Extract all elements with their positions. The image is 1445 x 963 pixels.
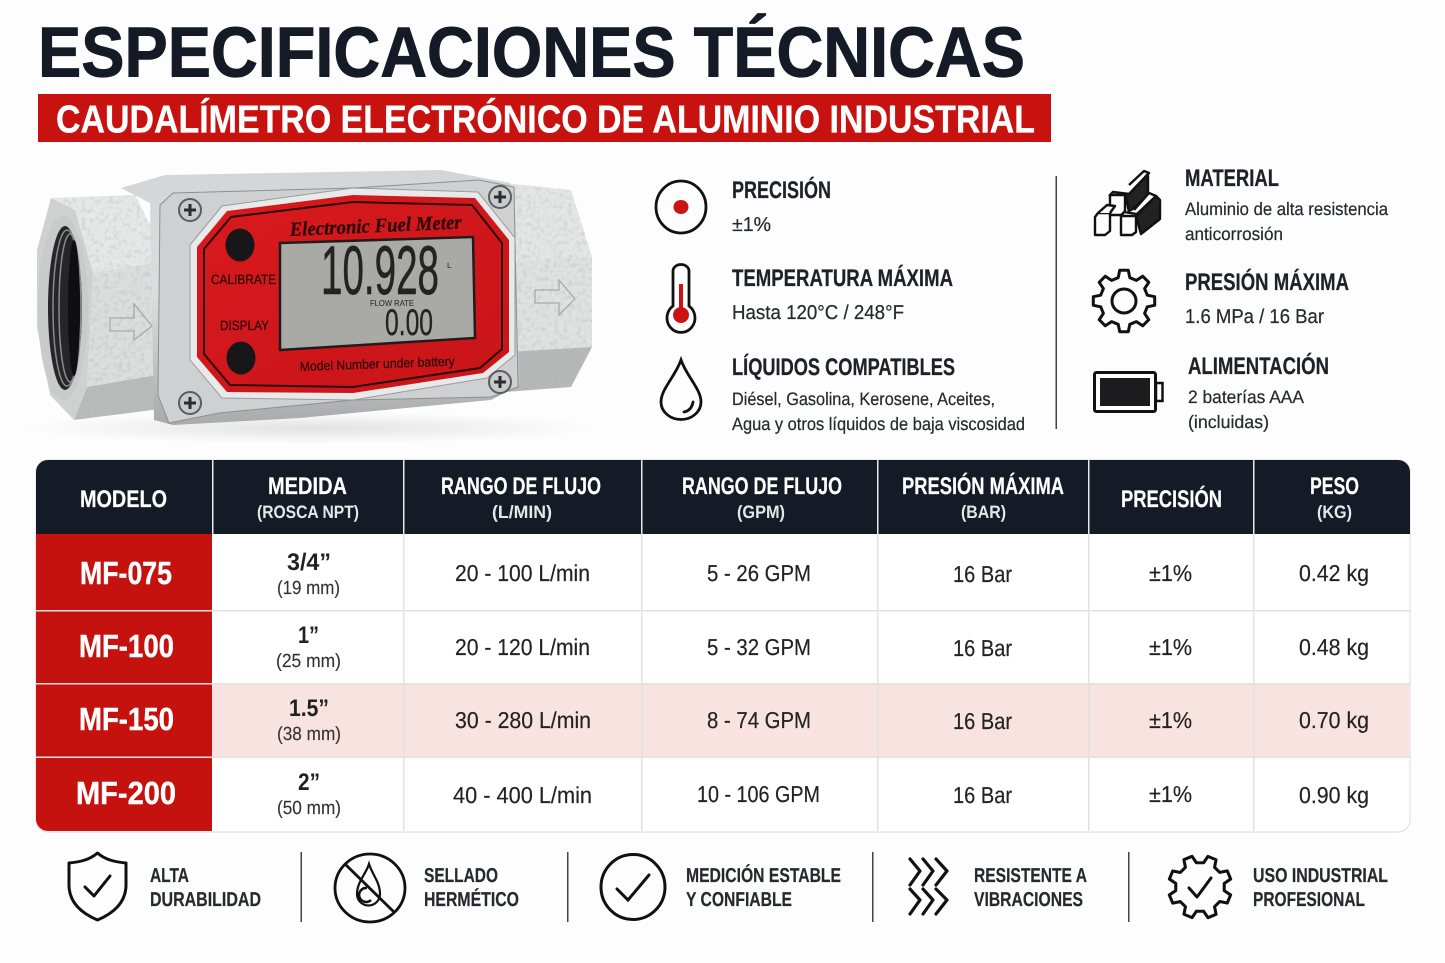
title: ESPECIFICACIONES TÉCNICAS [38,14,1025,92]
thread size column: 3/4” [287,549,331,576]
feature: vibration resistant: RESISTENTE A [974,865,1087,887]
spec: power supply: 2 baterías AAA [1188,387,1304,407]
fitting front face [37,198,93,420]
LCD display [280,237,475,350]
header row: MODELO [80,486,167,513]
spec: max pressure: PRESIÓN MÁXIMA [1185,268,1349,296]
max pressure column: 16 Bar [953,782,1012,808]
header row: MEDIDA [268,473,347,500]
feature: hermetic seal [335,854,519,922]
meter labels [211,212,462,374]
precision column: ±1% [1149,781,1192,807]
spec: compatible liquids [661,353,1025,434]
spec: precision [656,176,831,236]
icon: gear [1093,270,1155,332]
thread size column [276,549,341,819]
LCD readings: 0.00 [385,302,433,343]
screws [179,186,511,414]
weight column: 0.70 kg [1299,707,1369,733]
meter labels: Model Number under battery [300,354,455,374]
right threaded fitting [505,183,592,392]
buttons [226,228,254,262]
spec: precision: ±1% [732,214,771,236]
precision column: ±1% [1149,634,1192,660]
flow L/min column: 20 - 120 L/min [455,634,590,660]
flow GPM column: 8 - 74 GPM [707,707,811,733]
icon: shield check [69,853,126,920]
header row [36,460,1410,534]
feature: high durability: DURABILIDAD [150,889,261,911]
spec: material: Aluminio de alta resistencia [1185,199,1389,219]
feature: high durability [69,853,261,920]
feature: stable measurement: MEDICIÓN ESTABLE [686,864,841,887]
flow L/min column [453,560,592,808]
meter labels: CALIBRATE [211,272,276,287]
model column: MF-075 [80,555,172,591]
flow L/min column: 30 - 280 L/min [455,707,591,733]
max pressure column: 16 Bar [953,561,1012,587]
header row: PESO [1310,473,1359,500]
icon: target [656,181,706,233]
precision column [1149,560,1192,807]
header row: (GPM) [737,502,785,522]
spec: power supply: (incluidas) [1188,412,1269,432]
spec: max temperature [667,264,953,332]
meter body [121,170,520,425]
thread size column: (19 mm) [277,578,340,599]
feature: industrial use: PROFESIONAL [1253,889,1365,911]
spec: max pressure [1093,268,1349,332]
spec: power supply [1094,352,1329,432]
feature: vibration resistant [910,859,1087,914]
subtitle banner: CAUDALÍMETRO ELECTRÓNICO DE ALUMINIO INDUSTRIAL [56,98,1035,142]
spec: compatible liquids: Agua y otros líquidos de baja viscosidad [732,414,1025,434]
header row: (ROSCA NPT) [257,502,359,522]
meter labels: DISPLAY [220,318,269,333]
header row: PRESIÓN MÁXIMA [902,472,1064,500]
spec: precision: PRECISIÓN [732,176,831,204]
thread size column: (50 mm) [277,798,341,819]
spec: material [1095,165,1389,244]
flow GPM column: 10 - 106 GPM [697,781,820,807]
spec: max temperature: Hasta 120°C / 248°F [732,302,904,324]
spec: compatible liquids: Diésel, Gasolina, Kerosene, Aceites, [732,389,995,409]
feature: hermetic seal: SELLADO [424,865,498,887]
header row: (KG) [1317,502,1352,522]
weight column: 0.42 kg [1299,560,1369,586]
icon: aluminium profiles [1095,171,1160,235]
feature: stable measurement: Y CONFIABLE [686,889,792,911]
feature: high durability: ALTA [150,865,189,887]
spec: max pressure: 1.6 MPa / 16 Bar [1185,306,1324,328]
feature: vibration resistant: VIBRACIONES [974,889,1083,911]
header row: RANGO DE FLUJO [441,473,601,500]
red faceplate [197,195,509,393]
thread size column: 2” [298,769,320,796]
icon: thermometer [667,265,695,332]
thread size column: (38 mm) [277,724,341,745]
spec: material: anticorrosión [1185,224,1283,244]
thread size column: 1.5” [289,695,329,722]
thread size column: (25 mm) [276,651,341,672]
spec: compatible liquids: LÍQUIDOS COMPATIBLES [732,353,955,381]
max pressure column: 16 Bar [953,635,1012,661]
icon: crossed drop [335,854,405,922]
weight column: 0.90 kg [1299,782,1369,808]
model column: MF-150 [79,701,174,737]
meter labels: Electronic Fuel Meter [288,212,462,241]
spec: material: MATERIAL [1185,165,1279,192]
LCD readings: FLOW RATE [370,298,414,308]
weight column: 0.48 kg [1299,634,1369,660]
left threaded fitting [37,195,168,420]
max pressure column [953,561,1012,808]
feature: industrial use: USO INDUSTRIAL [1253,865,1388,887]
feature: stable measurement [601,854,841,920]
flow arrows [110,280,575,340]
LCD readings [321,232,452,343]
flow L/min column: 40 - 400 L/min [453,782,592,808]
thread size column: 1” [298,622,319,649]
LCD readings: 10.928 [321,232,439,309]
precision column: ±1% [1149,560,1192,586]
feature: industrial use [1159,846,1388,928]
header row: PRECISIÓN [1121,485,1222,513]
flow GPM column: 5 - 32 GPM [707,634,811,660]
threaded bore [38,216,88,400]
flow GPM column: 5 - 26 GPM [707,560,811,586]
weight column [1299,560,1369,808]
icon: battery [1094,372,1162,412]
highlighted row background [212,684,1410,757]
flow GPM column [697,560,820,807]
model column: MF-100 [79,628,174,664]
spec: max temperature: TEMPERATURA MÁXIMA [732,264,953,292]
LCD readings: L [447,261,452,270]
header row: (BAR) [961,502,1006,522]
model column: MF-200 [76,775,176,811]
icon: gear check [1159,846,1241,928]
header row: (L/MIN) [492,502,552,522]
feature: hermetic seal: HERMÉTICO [424,888,519,911]
max pressure column: 16 Bar [953,708,1012,734]
flow L/min column: 20 - 100 L/min [455,560,590,586]
product image: electronic fuel meter [20,170,600,444]
precision column: ±1% [1149,707,1192,733]
spec: power supply: ALIMENTACIÓN [1188,352,1329,380]
icon: drop [661,360,701,420]
icon: circle check [601,854,665,920]
header row: RANGO DE FLUJO [682,473,842,500]
icon: vibration chevrons [910,859,947,914]
specifications table [36,460,1410,832]
model column [36,534,212,831]
